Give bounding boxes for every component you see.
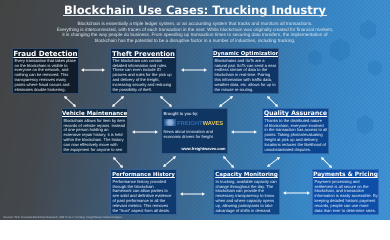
panel: vehicle maintenance: records of vehicle repairs. Instead [64,123,125,128]
arrow: sponsor to quality [231,130,257,134]
panel: performance history: framework can allow parties to [112,188,168,193]
panel: dynamic optimization: Dynamic Optimization [213,51,279,57]
source footnote: Sources: Tech Forwards Blockchain Research, IBM Trust in Trucking, FreightWaves Market Analysis [3,216,122,219]
panel: payments and pricing [312,169,379,215]
arrow: quality to payments [320,156,333,169]
panel: payments and pricing: settlement is all secure on the [314,184,369,189]
panel: fraud detection [12,48,79,94]
panel: fraud detection: on the blockchain is visible to [14,63,68,68]
panel: dynamic optimization: blockchain in real-time. Pairing [214,72,270,77]
panel: quality assurance: in the transaction has access to all [264,127,327,132]
panel: vehicle maintenance: Vehicle Maintenance [62,111,127,117]
panel: payments and pricing: information is easily accessible. By [314,193,378,198]
intro text: blockchain has the potential to be a disruptive factor in a number of industries, including trucking. [95,38,295,43]
arrow: dynamic to quality [266,95,279,108]
arrow: vehicle to theft [111,95,125,108]
panel: theft prevention [110,48,177,94]
panel: payments and pricing: Payment processing and [314,179,360,184]
panel: performance history: see solid and definitive evidence [112,193,171,198]
panel: theft prevention: detailed information and rules. [112,63,167,68]
panel: brought to you by: economic drivers for freight [164,134,213,139]
title: Blockchain Use Cases: Trucking Industry [64,3,326,17]
panel: quality assurance: locations reduces the likelihood of [264,142,326,147]
panel: capacity monitoring: blockchain can provide the [216,188,264,193]
panel: capacity monitoring: up, allowing participants to take [216,203,273,208]
panel: performance history: of past performance in all the [112,198,165,203]
arrow: vehicle to sponsor [132,130,158,134]
panel: vehicle maintenance: can now effectively move with [64,142,118,147]
arrow: sponsor to capacity [222,155,235,169]
panel: dynamic optimization: endless stream of data to the [214,67,267,72]
panel: brought to you by: News about innovation and [164,129,213,134]
panel: capacity monitoring: change throughout the day. The [216,184,273,189]
panel: vehicle maintenance [61,108,128,154]
panel: payments and pricing: data than ever to determine rates. [314,208,376,213]
panel: payments and pricing: Payments & Pricing [313,172,378,178]
panel: fraud detection: Every transaction that takes place [14,58,76,63]
arrow: capacity to payments [283,191,310,195]
panel: brought to you by: Brought to you by: [164,110,198,116]
panel: payments and pricing: keeping detailed historic payment [314,198,375,203]
panel: vehicle maintenance: Blockchain allows for item by item [64,118,125,123]
panel: fraud detection: Fraud Detection [13,49,78,58]
panel: capacity monitoring: In trucking, available capacity can [216,179,277,184]
panel: quality assurance: points. Taking photos/evaluating [264,132,323,137]
panel: dynamic optimization: this information with traffic data, [214,77,272,82]
panel: theft prevention: Theft Prevention [112,50,175,58]
panel: capacity monitoring: necessary transparency to know [216,193,274,198]
panel: vehicle maintenance: within the blockchain. The history [64,137,124,142]
arrow: fraud to vehicle [63,95,77,108]
panel: quality assurance: Thanks to the distributed nature [264,118,322,123]
panel: quality assurance: freight at pick up and delivery [264,137,318,142]
panel: quality assurance: of blockchain, everyone involved [264,123,324,128]
panel: vehicle maintenance: the equipment for anyone to see. [64,147,123,152]
panel: fraud detection: eliminates double brokering. [14,87,66,92]
arrow: performance to sponsor [162,155,177,168]
panel: performance history: relevant metrics. This removes [112,203,168,208]
panel: fraud detection: transparency removes many [14,77,66,82]
panel: vehicle maintenance: extensive repair history, it is held [64,132,123,137]
panel: dynamic optimization [212,48,279,94]
panel: performance history: Performance history provided [112,179,166,184]
arrow: theft to dynamic [181,68,207,72]
panel: theft prevention: increasing security and reducing [112,82,171,87]
panel: brought to you by: www.freightwaves.com [181,146,226,151]
panel: payments and pricing: records, people can use more [314,203,369,208]
intro text [57,21,333,43]
panel: quality assurance: unsubstantiated disputes. [264,147,311,152]
panel: dynamic optimization: natural pair. IIoTs can send a near [214,63,276,68]
panel: theft prevention: pictures and rules for the pick up [112,72,172,77]
panel: capacity monitoring: advantage of shifts in demand. [216,208,271,213]
panel: vehicle maintenance: of one person holding an [64,127,109,132]
panel: quality assurance: Quality Assurance [264,110,327,117]
panel: theft prevention: These can even include ID [112,67,161,72]
panel: capacity monitoring: Capacity Monitoring [215,172,278,178]
intro text: Everything is interconnected, with traces of each transaction in the next. While blockchain was originally created for financial markets, [57,27,333,32]
intro text: it is changing the way people do business. From speeding up transaction times to securing data transfers, the implementation of [62,32,328,37]
panel: dynamic optimization: Blockchains and IIoTs are a [214,58,265,63]
panel: dynamic optimization: weather data, etc. allows for up to [214,82,276,87]
panel: fraud detection: nothing can be removed. This [14,72,68,77]
arrow: theft to sponsor [159,95,173,108]
arrow: capacity to quality [266,156,281,168]
intro text: Blockchain is essentially a triple ledger system, or an accounting system that tracks and monitors all transactions. [77,21,312,26]
panel: capacity monitoring: when and where capacity opens [216,198,274,203]
panel: brought to you by [161,108,228,154]
panel: theft prevention: The blockchain can contain [112,58,162,63]
logo: FreightWaves [164,119,223,127]
panel: theft prevention: the possibility of theft. [112,87,152,92]
panel: payments and pricing: blockchain, and transaction [314,188,364,193]
panel: fraud detection: everyone on the network, and [14,67,68,72]
arrow: performance to capacity [180,192,205,196]
panel: quality assurance [262,108,329,154]
panel: capacity monitoring [213,169,280,215]
arrow: vehicle to performance [112,156,124,169]
panel: performance history: through the blockchain [112,184,154,189]
panel: performance history [110,169,177,215]
panel: fraud detection: points where fraud occurs and [14,82,69,87]
panel: performance history: Performance History [112,172,175,178]
panel: theft prevention: and delivery of the freight, [112,77,160,82]
arrow: sponsor to dynamic [218,95,234,108]
panel: performance history: the "trust" aspect from all deals. [112,208,170,213]
arrow: fraud to theft [81,68,105,72]
logo: FreightWaves: FREIGHTWAVES [177,121,223,127]
panel: dynamic optimization: the minute re-routing. [214,87,253,92]
